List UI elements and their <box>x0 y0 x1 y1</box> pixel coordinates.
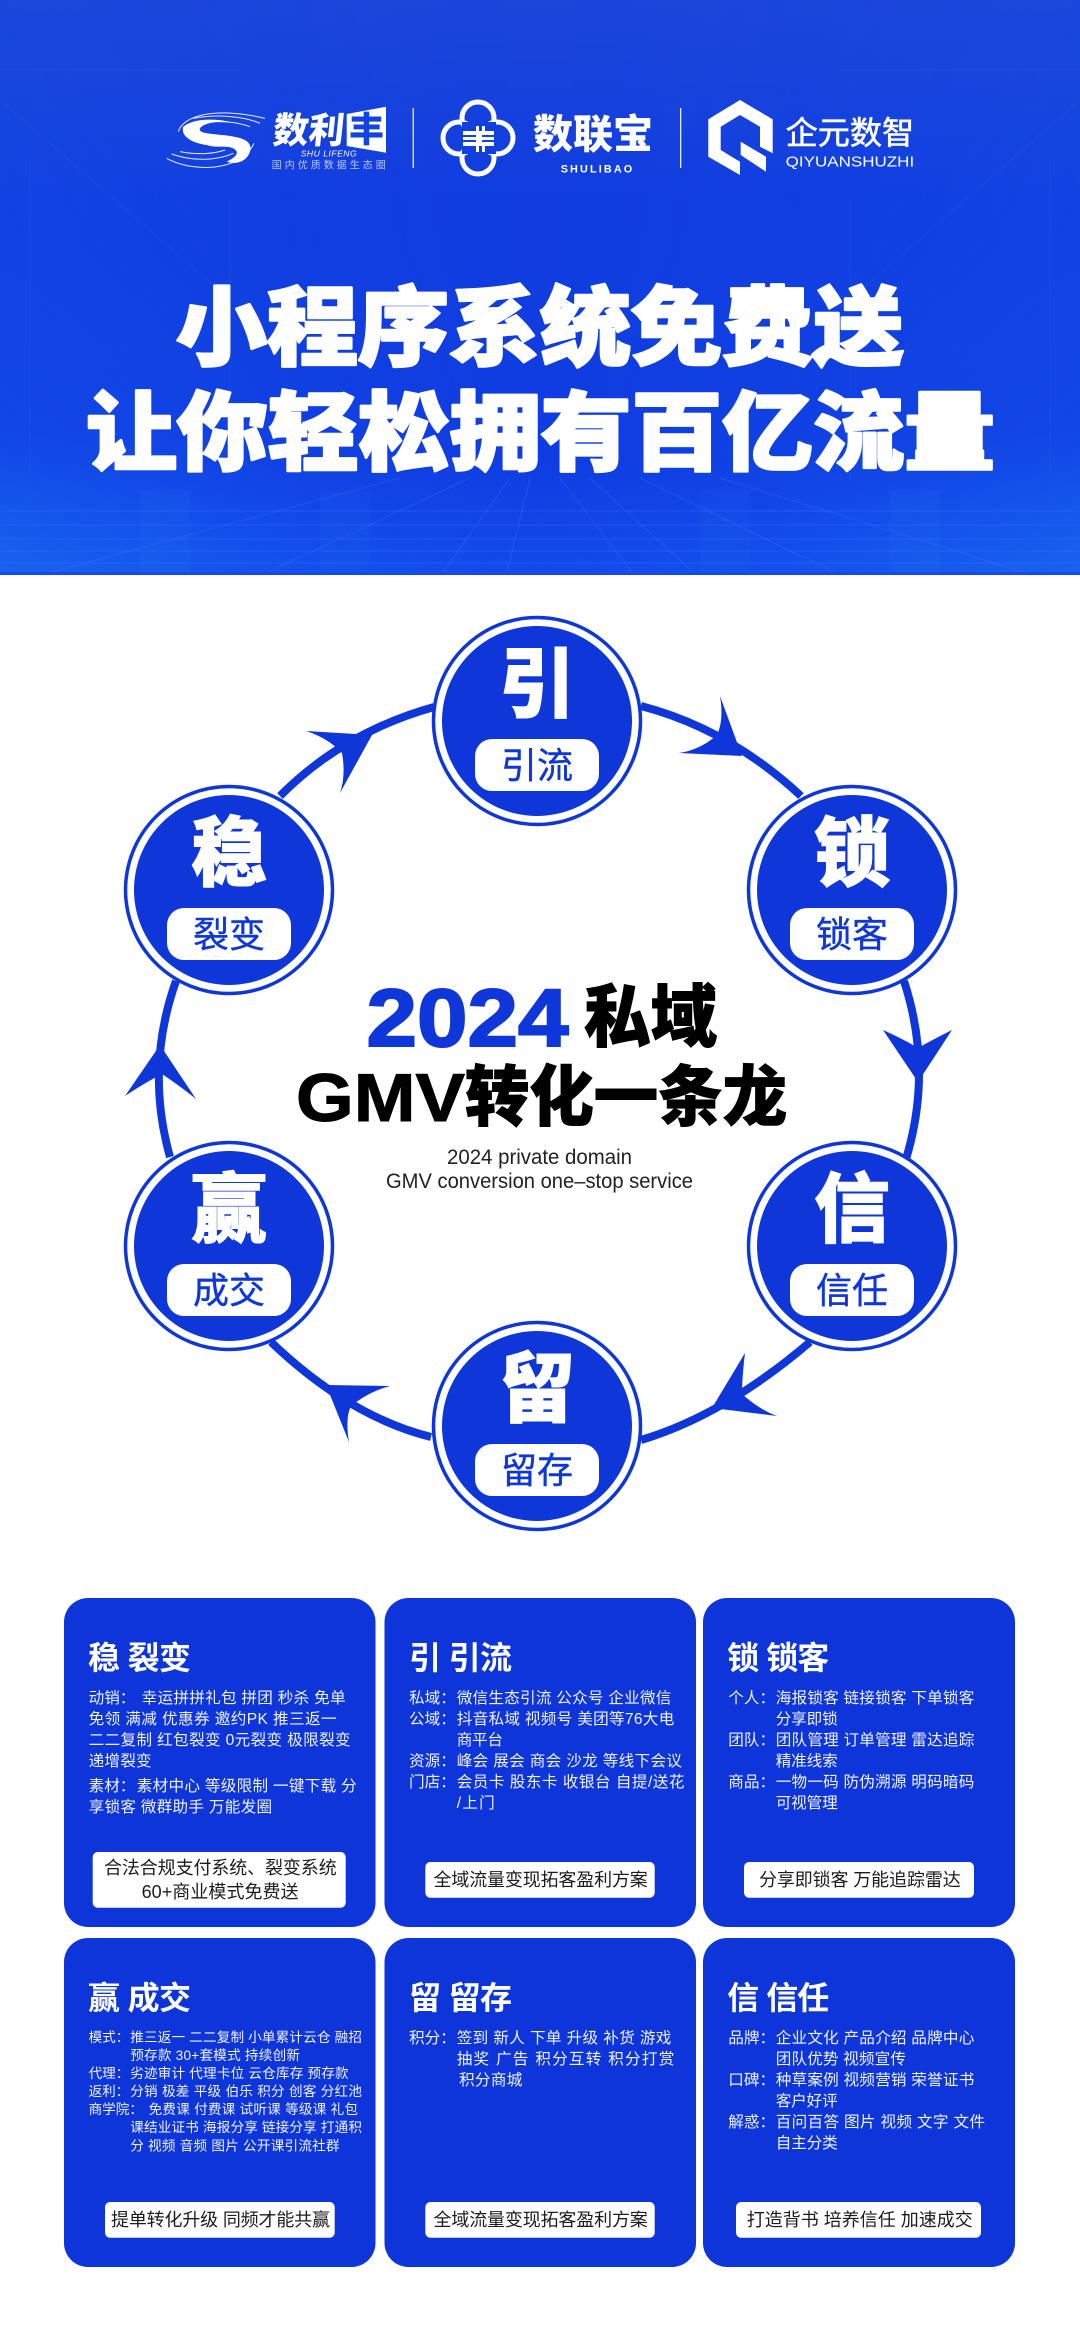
heading: 引 引流 <box>409 1640 512 1676</box>
panel: 留 留存 <box>384 1938 696 2267</box>
panel: 引 引流 <box>384 1598 696 1927</box>
text block: 可视管理 <box>776 1794 838 1812</box>
text block: 口碑： <box>728 2071 775 2089</box>
center subtitle: GMV conversion one–stop service <box>386 1170 693 1193</box>
callout: 提单转化升级 同频才能共赢 <box>111 2209 330 2230</box>
panel: 信 信任 <box>703 1938 1015 2267</box>
text block: 个人： <box>728 1689 775 1707</box>
text block: 预存款 30+套模式 持续创新 <box>130 2048 300 2063</box>
text block <box>728 2029 985 2152</box>
node: 留 留存 <box>434 1322 640 1530</box>
text block: 模式： <box>89 2030 129 2045</box>
text block: 动销： <box>89 1689 135 1707</box>
cycle diagram <box>125 618 956 1530</box>
icon: swirl <box>167 113 265 167</box>
text block: 分销 极差 平级 伯乐 积分 创客 分红池 <box>130 2083 362 2099</box>
text block: 企业文化 产品介绍 品牌中心 <box>776 2029 975 2047</box>
icon: hexagon Q <box>708 100 773 175</box>
logo: 企元数智: 企元数智 <box>786 115 914 151</box>
logo: 数利丰: 数利 <box>271 110 346 151</box>
callout: 打造背书 培养信任 加速成交 <box>747 2210 973 2230</box>
node: 留 留存: 留存 <box>501 1450 573 1491</box>
heading: 赢 成交 <box>88 1980 191 2016</box>
text block <box>728 1689 975 1812</box>
node: 锁 锁客: 锁客 <box>816 914 888 955</box>
callout: 60+商业模式免费送 <box>142 1882 299 1902</box>
icon: clover <box>443 102 513 174</box>
text block: 解惑： <box>728 2113 775 2131</box>
text block: 海报锁客 链接锁客 下单锁客 <box>776 1689 975 1707</box>
text block: 一物一码 防伪溯源 明码暗码 <box>776 1773 974 1791</box>
text block: 客户好评 <box>776 2092 838 2110</box>
text block: 代理： <box>89 2066 129 2081</box>
text block: 微信生态引流 公众号 企业微信 <box>457 1689 671 1707</box>
text block: 商品： <box>728 1773 775 1791</box>
text block: 精准线索 <box>776 1752 838 1770</box>
center heading <box>296 973 787 1136</box>
heading: 信 信任 <box>727 1980 829 2016</box>
heading: 锁 锁客 <box>727 1640 829 1676</box>
node: 引 引流: 引 <box>499 643 575 728</box>
node: 信 信任: 信 <box>814 1168 890 1253</box>
callout: 合法合规支付系统、裂变系统 <box>104 1858 337 1878</box>
logo: 数联宝 <box>443 102 653 175</box>
arrows ring <box>125 696 952 1442</box>
text block: 返利： <box>89 2084 129 2099</box>
text block: 私域： <box>409 1689 456 1707</box>
text block: 品牌： <box>728 2029 775 2047</box>
callout <box>425 1862 655 1898</box>
text block: 课结业证书 海报分享 链接分享 打通积 <box>130 2119 362 2135</box>
panel: 稳 裂变 <box>64 1598 376 1927</box>
callout <box>736 2202 981 2238</box>
text block: 自主分类 <box>776 2134 838 2152</box>
text block: 商平台 <box>457 1731 503 1749</box>
text block: 推三返一 二二复制 小单累计云仓 融招 <box>130 2029 362 2045</box>
header background <box>0 0 1080 575</box>
text block: 分享即锁 <box>776 1710 838 1728</box>
logo: 企元数智 <box>708 100 914 175</box>
callout <box>105 2202 335 2238</box>
text block: 免领 满减 优惠券 邀约PK 推三返一 <box>89 1710 337 1728</box>
node: 赢 成交 <box>126 1142 332 1350</box>
text block <box>409 1689 684 1812</box>
node: 信 信任: 信任 <box>816 1270 888 1311</box>
text block: 团队： <box>728 1731 775 1749</box>
node: 引 引流 <box>434 618 640 824</box>
text block: 享锁客 微群助手 万能发圈 <box>89 1798 272 1816</box>
node: 留 留存: 留 <box>499 1348 575 1433</box>
text block: 分 视频 音频 图片 公开课引流社群 <box>130 2138 340 2154</box>
center subtitle: 2024 private domain <box>447 1146 632 1169</box>
node: 稳 裂变 <box>126 786 332 994</box>
panel: 赢 成交 <box>64 1938 376 2267</box>
center subtitle <box>386 1146 693 1193</box>
text block: 团队管理 订单管理 雷达追踪 <box>776 1731 975 1749</box>
text block: 百问百答 图片 视频 文字 文件 <box>776 2113 985 2131</box>
text block: 资源： <box>409 1752 456 1770</box>
text block: 门店： <box>409 1773 456 1791</box>
title: 让你轻松拥有百亿流量 <box>86 386 995 482</box>
node: 稳 裂变: 裂变 <box>193 914 265 955</box>
text block: 积分商城 <box>459 2071 523 2089</box>
callout <box>425 2202 655 2238</box>
node: 稳 裂变: 稳 <box>191 812 267 897</box>
node: 信 信任 <box>748 1142 956 1350</box>
text block: 积分： <box>409 2029 456 2047</box>
logo: 企元数智: QIYUANSHUZHI <box>786 154 914 171</box>
logo: 数联宝: SHULIBAO <box>561 163 632 175</box>
heading: 留 留存 <box>409 1980 512 2016</box>
callout: 分享即锁客 万能追踪雷达 <box>759 1870 961 1890</box>
panel: blue header <box>0 0 1080 575</box>
text block: 抖音私域 视频号 美团等76大电 <box>457 1710 674 1728</box>
text block: 幸运拼拼礼包 拼团 秒杀 免单 <box>142 1689 346 1707</box>
title: 小程序系统免费送 <box>176 281 904 377</box>
logo: 数利丰: 丰 <box>349 111 384 150</box>
node: 赢 成交: 赢 <box>191 1168 267 1253</box>
text block: 劣迹审计 代理卡位 云仓库存 预存款 <box>130 2066 349 2081</box>
center heading: 2024 <box>366 973 569 1064</box>
text block: 抽奖 广告 积分互转 积分打赏 <box>457 2050 674 2068</box>
text block: 免费课 付费课 试听课 等级课 礼包 <box>149 2101 358 2117</box>
heading: 稳 裂变 <box>88 1640 191 1676</box>
panel: 锁 锁客 <box>703 1598 1015 1927</box>
node: 赢 成交: 成交 <box>193 1270 265 1311</box>
node: 锁 锁客 <box>748 786 956 994</box>
text block: 会员卡 股东卡 收银台 自提/送花 <box>457 1773 684 1791</box>
text block <box>409 2029 674 2089</box>
text block: 种草案例 视频营销 荣誉证书 <box>776 2071 974 2089</box>
callout <box>93 1852 346 1908</box>
title <box>86 281 995 482</box>
callout <box>744 1862 974 1898</box>
text block: 签到 新人 下单 升级 补货 游戏 <box>457 2029 671 2047</box>
text block: 峰会 展会 商会 沙龙 等线下会议 <box>457 1752 682 1770</box>
text block: 公域： <box>409 1710 456 1728</box>
text block: 商学院： <box>89 2102 143 2117</box>
text block: 递增裂变 <box>89 1752 152 1770</box>
center heading: 私域 <box>584 980 717 1056</box>
center heading: GMV <box>296 1060 465 1136</box>
logo: 数利丰: 国内优质数据生态圈 <box>272 158 386 172</box>
logo: 数利丰 <box>167 107 386 172</box>
text block: /上门 <box>457 1794 495 1812</box>
text block <box>89 1689 357 1816</box>
text block: 团队优势 视频宣传 <box>776 2050 906 2068</box>
divider 2 <box>680 108 681 168</box>
logo: 数利丰: SHU LIFENG <box>301 149 357 159</box>
center heading: 转化一条龙 <box>465 1060 787 1134</box>
text block <box>89 2029 362 2154</box>
callout: 全域流量变现拓客盈利方案 <box>434 2210 648 2230</box>
divider 1 <box>413 108 414 168</box>
text block: 二二复制 红包裂变 0元裂变 极限裂变 <box>89 1731 351 1749</box>
node: 锁 锁客: 锁 <box>814 812 890 897</box>
node: 引 引流: 引流 <box>501 745 573 786</box>
text block: 素材： <box>89 1777 135 1795</box>
callout: 全域流量变现拓客盈利方案 <box>434 1870 648 1890</box>
text block: 素材中心 等级限制 一键下载 分 <box>137 1777 357 1795</box>
logo: 数联宝: 数联宝 <box>533 113 653 157</box>
